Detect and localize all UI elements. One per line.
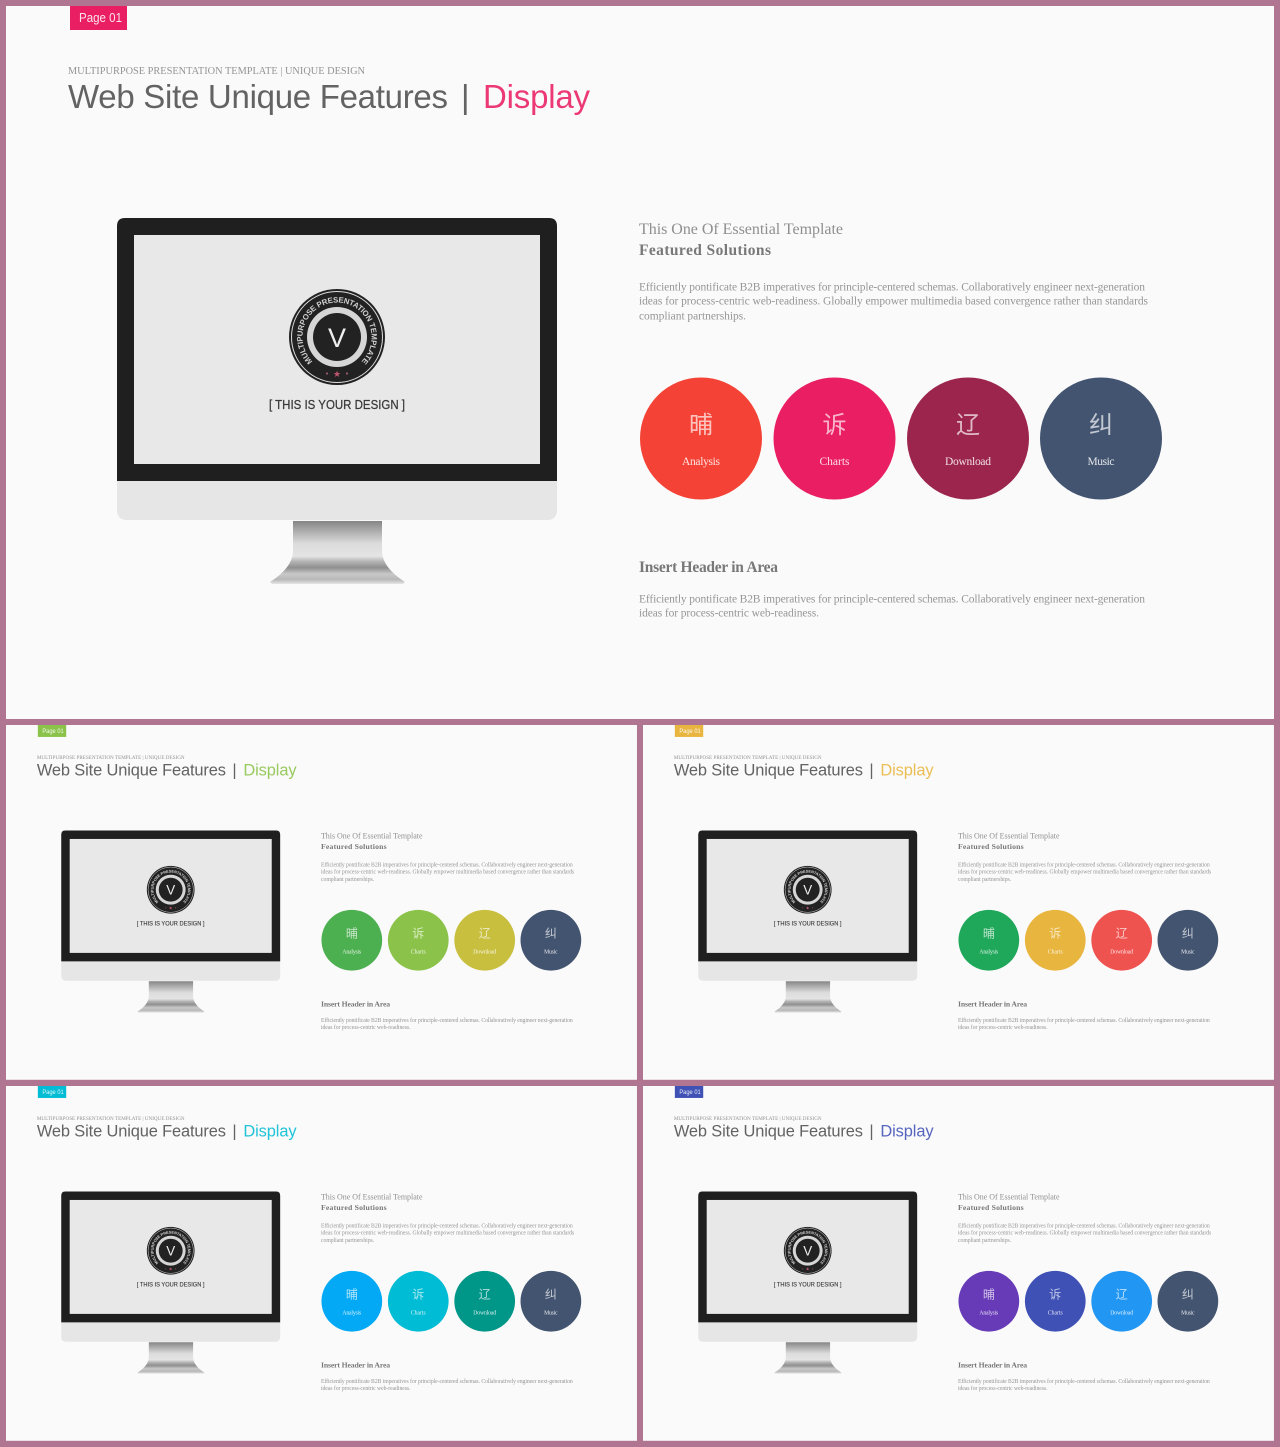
- logo badge: [289, 289, 385, 385]
- featured solutions text: Efficiently pontificate B2B imperatives for principle-centered schemas. Collaboratively engineer next-generation: [958, 862, 1210, 869]
- logo badge: ★: [806, 906, 810, 912]
- circle: analysis: Analysis: [979, 949, 999, 955]
- featured solutions text: Featured Solutions: [321, 842, 387, 851]
- circle: analysis: Analysis: [682, 456, 721, 468]
- insert header text: [958, 1000, 1210, 1031]
- logo badge: V: [803, 1244, 812, 1259]
- featured solutions text: This One Of Essential Template: [958, 831, 1060, 840]
- screen caption: [ THIS IS YOUR DESIGN ]: [269, 398, 405, 412]
- heading: |: [869, 1123, 874, 1141]
- circle: charts: [388, 910, 449, 971]
- insert header text: Insert Header in Area: [958, 1361, 1027, 1370]
- featured solutions text: Featured Solutions: [958, 842, 1024, 851]
- logo badge: MULTIPURPOSE PRESENTATION TEMPLATE: [788, 870, 828, 904]
- heading: Web Site Unique Features: [674, 1123, 863, 1141]
- insert header text: Efficiently pontificate B2B imperatives for principle-centered schemas. Collaboratively engineer next-generation: [639, 594, 1145, 606]
- circle: music: Music: [544, 1310, 558, 1316]
- circle: analysis: 晡: [346, 926, 358, 940]
- featured solutions text: [958, 831, 1212, 883]
- featured solutions text: compliant partnerships.: [321, 1238, 375, 1244]
- circle: analysis: [640, 378, 762, 500]
- insert header text: ideas for process-centric web-readiness.: [958, 1385, 1048, 1392]
- panel: indigo slide: [643, 1086, 1274, 1441]
- featured solutions text: Efficiently pontificate B2B imperatives for principle-centered schemas. Collaboratively engineer next-generation: [958, 1223, 1210, 1230]
- heading: Display: [243, 762, 297, 780]
- heading: Web Site Unique Features: [37, 762, 226, 780]
- monitor illustration: [61, 830, 280, 1012]
- screen caption: [ THIS IS YOUR DESIGN ]: [137, 1282, 205, 1289]
- circle: music: [1040, 378, 1162, 500]
- featured solutions text: compliant partnerships.: [639, 310, 746, 322]
- panel: cyan slide: [6, 1086, 637, 1441]
- insert header text: [321, 1000, 573, 1031]
- logo badge: MULTIPURPOSE PRESENTATION TEMPLATE: [150, 870, 191, 904]
- featured solutions text: ideas for process-centric web-readiness. Globally empower multimedia based convergence rather than standards: [321, 869, 575, 876]
- circle: charts: Charts: [1048, 1310, 1063, 1316]
- featured solutions text: compliant partnerships.: [321, 877, 375, 883]
- circle: charts: [1025, 1271, 1086, 1332]
- circle: download: Download: [473, 1310, 496, 1316]
- circle: charts: 诉: [822, 412, 846, 439]
- circle: download: 辽: [479, 1287, 491, 1301]
- circle: analysis: [321, 1271, 382, 1332]
- logo badge: V: [166, 883, 175, 898]
- circle: charts: 诉: [412, 926, 424, 940]
- logo badge: MULTIPURPOSE PRESENTATION TEMPLATE: [788, 1230, 828, 1264]
- circle: analysis: [958, 910, 1019, 971]
- circle: music: Music: [1181, 1310, 1195, 1316]
- circle: analysis: Analysis: [342, 1310, 362, 1316]
- circle: download: [454, 910, 515, 971]
- featured solutions text: Efficiently pontificate B2B imperatives for principle-centered schemas. Collaboratively engineer next-generation: [321, 862, 573, 869]
- logo badge: MULTIPURPOSE PRESENTATION TEMPLATE: [297, 297, 377, 365]
- heading: [68, 65, 590, 115]
- featured solutions text: ideas for process-centric web-readiness. Globally empower multimedia based convergence rather than standards: [321, 1230, 575, 1237]
- feature circles: [321, 1271, 581, 1332]
- circle: download: Download: [945, 456, 991, 468]
- page tag: [675, 1086, 703, 1098]
- insert header text: Insert Header in Area: [321, 1000, 390, 1009]
- heading: MULTIPURPOSE PRESENTATION TEMPLATE | UNIQUE DESIGN: [37, 1116, 185, 1122]
- featured solutions text: Featured Solutions: [321, 1203, 387, 1212]
- logo badge: ★: [169, 1267, 173, 1273]
- featured solutions text: This One Of Essential Template: [958, 1192, 1060, 1201]
- monitor illustration: [61, 1192, 280, 1374]
- featured solutions text: Featured Solutions: [639, 242, 771, 259]
- circle: download: 辽: [1116, 926, 1128, 940]
- featured solutions text: compliant partnerships.: [958, 1238, 1012, 1244]
- circle: download: Download: [473, 949, 496, 955]
- logo badge: [146, 1226, 195, 1275]
- heading: [674, 755, 934, 780]
- circle: download: [1091, 910, 1152, 971]
- heading: MULTIPURPOSE PRESENTATION TEMPLATE | UNIQUE DESIGN: [37, 755, 185, 761]
- screen caption: [ THIS IS YOUR DESIGN ]: [137, 921, 205, 928]
- circle: charts: Charts: [411, 1310, 426, 1316]
- circle: charts: Charts: [820, 456, 850, 468]
- feature circles: [958, 910, 1218, 971]
- heading: |: [232, 1123, 237, 1141]
- page tag: Page 01: [679, 728, 701, 735]
- circle: charts: [1025, 910, 1086, 971]
- circle: music: Music: [544, 949, 558, 955]
- circle: charts: [388, 1271, 449, 1332]
- circle: music: 纠: [1089, 412, 1113, 439]
- circle: download: Download: [1110, 949, 1133, 955]
- circle: music: [521, 910, 581, 971]
- circle: music: 纠: [1182, 1287, 1194, 1301]
- circle: music: Music: [1088, 456, 1114, 468]
- featured solutions text: [321, 831, 575, 883]
- circle: analysis: 晡: [689, 412, 713, 439]
- circle: download: 辽: [479, 926, 491, 940]
- circle: analysis: [958, 1271, 1019, 1332]
- circle: analysis: 晡: [346, 1287, 358, 1301]
- heading: |: [232, 762, 237, 780]
- panel: green slide: [6, 725, 637, 1080]
- featured solutions text: [958, 1192, 1212, 1244]
- logo badge: V: [328, 323, 346, 353]
- page tag: Page 01: [679, 1089, 701, 1096]
- page tag: [675, 725, 703, 737]
- logo badge: [784, 866, 832, 914]
- circle: analysis: Analysis: [979, 1310, 999, 1316]
- circle: charts: Charts: [1048, 949, 1063, 955]
- heading: MULTIPURPOSE PRESENTATION TEMPLATE | UNIQUE DESIGN: [674, 1116, 822, 1122]
- circle: music: 纠: [1182, 926, 1194, 940]
- insert header text: ideas for process-centric web-readiness.: [958, 1024, 1048, 1031]
- monitor illustration: [698, 1192, 918, 1374]
- page tag: [38, 725, 66, 737]
- circle: analysis: 晡: [983, 1287, 995, 1301]
- feature circles: [321, 910, 581, 971]
- circle: charts: 诉: [412, 1287, 424, 1301]
- circle: download: 辽: [956, 412, 980, 439]
- circle: music: [1158, 910, 1218, 971]
- circle: download: Download: [1110, 1310, 1133, 1316]
- screen caption: [ THIS IS YOUR DESIGN ]: [774, 921, 842, 928]
- featured solutions text: ideas for process-centric web-readiness. Globally empower multimedia based convergence rather than standards: [958, 1230, 1212, 1237]
- monitor illustration: [117, 218, 557, 584]
- circle: charts: 诉: [1049, 926, 1061, 940]
- heading: MULTIPURPOSE PRESENTATION TEMPLATE | UNIQUE DESIGN: [674, 755, 822, 761]
- circle: music: Music: [1181, 949, 1195, 955]
- featured solutions text: [639, 221, 1149, 322]
- featured solutions text: This One Of Essential Template: [321, 1192, 423, 1201]
- logo badge: MULTIPURPOSE PRESENTATION TEMPLATE: [150, 1230, 191, 1264]
- insert header text: Efficiently pontificate B2B imperatives for principle-centered schemas. Collaboratively engineer next-generation: [321, 1017, 573, 1024]
- insert header text: Insert Header in Area: [639, 559, 778, 576]
- logo badge: V: [803, 883, 812, 898]
- circle: charts: 诉: [1049, 1287, 1061, 1301]
- insert header text: Efficiently pontificate B2B imperatives for principle-centered schemas. Collaboratively engineer next-generation: [321, 1378, 573, 1385]
- circle: analysis: Analysis: [342, 949, 362, 955]
- heading: Display: [483, 78, 590, 115]
- logo badge: V: [166, 1244, 175, 1259]
- circle: music: [1158, 1271, 1218, 1332]
- monitor illustration: [698, 830, 918, 1012]
- insert header text: [321, 1361, 573, 1392]
- page tag: [38, 1086, 66, 1098]
- insert header text: [639, 559, 1145, 620]
- circle: download: [454, 1271, 515, 1332]
- insert header text: ideas for process-centric web-readiness.: [639, 608, 819, 620]
- panel: orange slide: [643, 725, 1274, 1080]
- circle: music: 纠: [545, 926, 557, 940]
- insert header text: ideas for process-centric web-readiness.: [321, 1024, 411, 1031]
- insert header text: ideas for process-centric web-readiness.: [321, 1385, 411, 1392]
- page tag: Page 01: [42, 1089, 64, 1096]
- featured solutions text: Efficiently pontificate B2B imperatives for principle-centered schemas. Collaboratively engineer next-generation: [321, 1223, 573, 1230]
- page tag: Page 01: [79, 10, 122, 25]
- heading: [37, 755, 297, 780]
- heading: Display: [243, 1123, 297, 1141]
- circle: music: 纠: [545, 1287, 557, 1301]
- circle: download: [907, 378, 1029, 500]
- circle: charts: [774, 378, 896, 500]
- logo badge: ★: [806, 1267, 810, 1273]
- heading: Web Site Unique Features: [37, 1123, 226, 1141]
- logo badge: [146, 866, 195, 914]
- heading: |: [461, 78, 470, 115]
- page tag: Page 01: [42, 728, 64, 735]
- featured solutions text: This One Of Essential Template: [321, 831, 423, 840]
- featured solutions text: This One Of Essential Template: [639, 221, 843, 238]
- heading: [37, 1116, 297, 1141]
- logo badge: [784, 1226, 832, 1275]
- insert header text: Efficiently pontificate B2B imperatives for principle-centered schemas. Collaboratively engineer next-generation: [958, 1378, 1210, 1385]
- circle: analysis: 晡: [983, 926, 995, 940]
- insert header text: Efficiently pontificate B2B imperatives for principle-centered schemas. Collaboratively engineer next-generation: [958, 1017, 1210, 1024]
- panel: main slide (pink): [6, 6, 1274, 719]
- screen caption: [ THIS IS YOUR DESIGN ]: [774, 1282, 842, 1289]
- insert header text: [958, 1361, 1210, 1392]
- circle: charts: Charts: [411, 949, 426, 955]
- featured solutions text: ideas for process-centric web-readiness. Globally empower multimedia based convergence rather than standards: [958, 869, 1212, 876]
- heading: [674, 1116, 934, 1141]
- heading: Display: [880, 762, 934, 780]
- feature circles: [958, 1271, 1218, 1332]
- feature circles: [640, 378, 1162, 500]
- featured solutions text: Featured Solutions: [958, 1203, 1024, 1212]
- featured solutions text: compliant partnerships.: [958, 877, 1012, 883]
- heading: Web Site Unique Features: [674, 762, 863, 780]
- featured solutions text: ideas for process-centric web-readiness. Globally empower multimedia based convergence rather than standards: [639, 296, 1149, 308]
- circle: music: [521, 1271, 581, 1332]
- insert header text: Insert Header in Area: [958, 1000, 1027, 1009]
- circle: download: [1091, 1271, 1152, 1332]
- insert header text: Insert Header in Area: [321, 1361, 390, 1370]
- circle: analysis: [321, 910, 382, 971]
- logo badge: ★: [333, 370, 341, 380]
- heading: Web Site Unique Features: [68, 78, 448, 115]
- page tag: [70, 6, 127, 30]
- logo badge: ★: [169, 906, 173, 912]
- circle: download: 辽: [1116, 1287, 1128, 1301]
- heading: MULTIPURPOSE PRESENTATION TEMPLATE | UNIQUE DESIGN: [68, 65, 365, 77]
- heading: Display: [880, 1123, 934, 1141]
- heading: |: [869, 762, 874, 780]
- featured solutions text: Efficiently pontificate B2B imperatives for principle-centered schemas. Collaboratively engineer next-generation: [639, 282, 1145, 294]
- featured solutions text: [321, 1192, 575, 1244]
